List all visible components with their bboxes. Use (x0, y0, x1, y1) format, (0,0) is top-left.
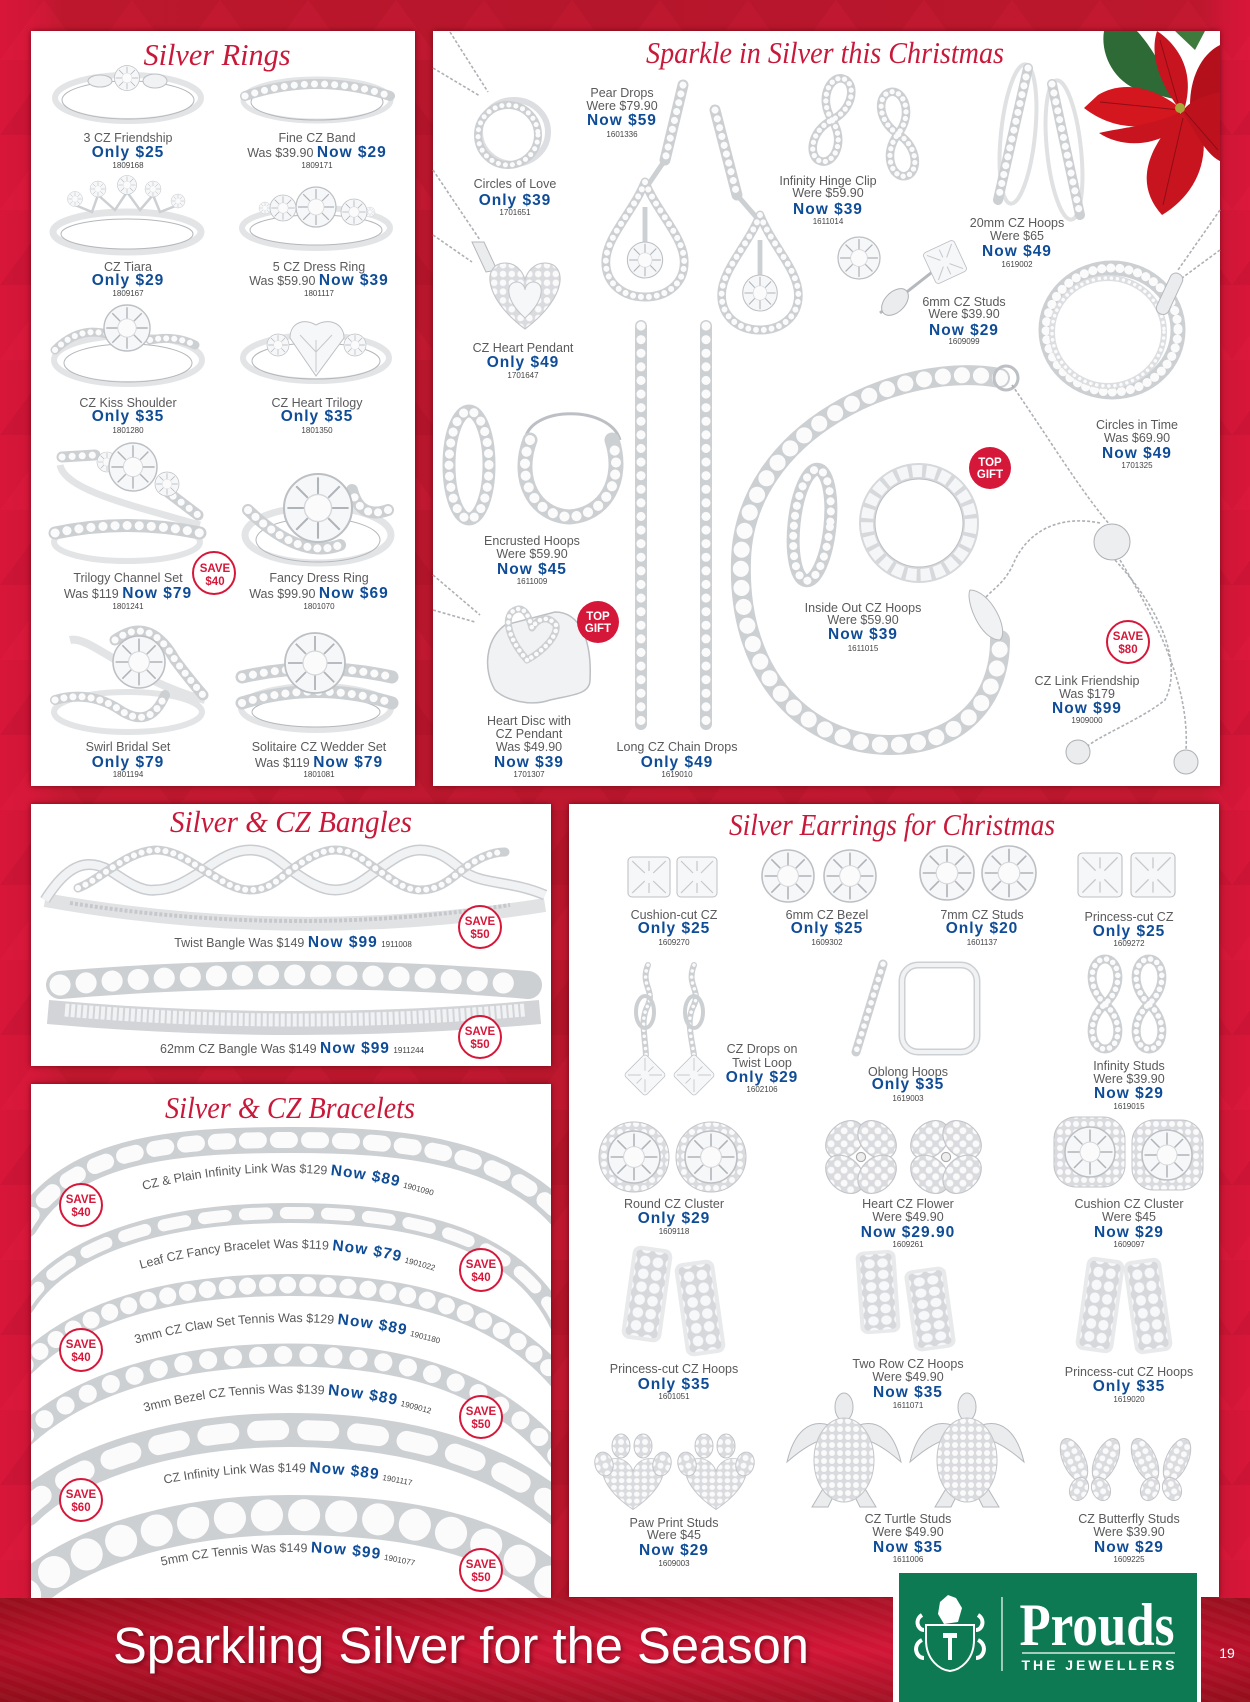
label: trilogy channel set: Trilogy Channel Set (73, 571, 183, 585)
label: heart CZ flower: Now $29.90 (861, 1224, 955, 1241)
label: circles in time: Was $69.90 (1104, 431, 1170, 445)
label: princess-cut CZ hoops: Only $35 (638, 1376, 710, 1393)
label: CZ heart pendant: CZ Heart Pendant (473, 341, 574, 355)
label: CZ and plain infinity link: CZ & Plain Infinity Link Was $129 Now $89 1901090 (142, 1164, 434, 1196)
label: 3 CZ friendship: 1809168 (112, 161, 144, 170)
label: round CZ cluster: 1609118 (659, 1227, 690, 1236)
label: circles in time: 1701325 (1121, 461, 1153, 470)
label: CZ link friendship: Was $179 (1059, 687, 1115, 701)
badge: save $50: $50 (470, 1039, 490, 1051)
label: cushion-cut CZ: 1609270 (658, 938, 690, 947)
label: long CZ chain drops: Long CZ Chain Drops (617, 740, 737, 754)
label: infinity studs: Were $39.90 (1093, 1072, 1165, 1086)
label: princess-cut CZ hoops: 1601051 (658, 1392, 690, 1401)
label: princess-cut CZ: Princess-cut CZ (1085, 910, 1174, 924)
label: CZ tiara: CZ Tiara (104, 260, 152, 274)
label: long CZ chain drops: 1619010 (661, 770, 693, 779)
label: trilogy channel set: Was $119 Now $79 (64, 585, 192, 602)
label: twist bangle: Twist Bangle Was $149 Now $99 1911008 (174, 934, 412, 951)
label: 7mm CZ studs: Only $20 (946, 920, 1018, 937)
label: solitaire CZ wedder set: 1801081 (303, 770, 335, 779)
label: cushion CZ cluster (1074, 1197, 1184, 1249)
icon: pear drop earrings (606, 85, 798, 330)
label: circles in time (1096, 418, 1178, 470)
label: paw print studs (630, 1516, 718, 1568)
icon: crest (916, 1595, 984, 1671)
label: CZ turtle studs: Now $35 (873, 1539, 943, 1556)
label: 6mm CZ bezel: Only $25 (791, 920, 863, 937)
badge: save $80: SAVE (1113, 631, 1144, 643)
label: infinity hinge clip (779, 174, 877, 226)
badge: top gift: TOP (586, 611, 610, 623)
badge: save $50: $50 (471, 1572, 491, 1584)
label: two row CZ hoops: Were $49.90 (872, 1370, 944, 1384)
label: princess-cut CZ hoops (610, 1362, 738, 1401)
label: 5 CZ dress ring: 5 CZ Dress Ring (273, 260, 365, 274)
label: leaf CZ fancy bracelet: Leaf CZ Fancy Bracelet Was $119 Now $79 1901022 (140, 1239, 436, 1271)
label: CZ tiara (92, 260, 164, 298)
label: 6mm CZ bezel: 1609302 (811, 938, 843, 947)
divider line in logo (1001, 1597, 1003, 1671)
icon: long CZ chain drop earrings (641, 326, 706, 724)
label: CZ turtle studs (865, 1512, 951, 1564)
label: princess-cut CZ hoops: Princess-cut CZ Hoops (610, 1362, 738, 1376)
label: CZ turtle studs: CZ Turtle Studs (865, 1512, 951, 1526)
label: 6mm CZ bezel (786, 908, 868, 947)
badge: save $40: $40 (71, 1352, 91, 1364)
heading: bangles: Silver & CZ Bangles (170, 804, 412, 839)
label: CZ heart trilogy: CZ Heart Trilogy (272, 396, 363, 410)
label: CZ heart trilogy: 1801350 (301, 426, 333, 435)
badge: save $50: $50 (470, 929, 490, 941)
label: princess-cut CZ: 1609272 (1113, 939, 1145, 948)
label: two row CZ hoops: Now $35 (873, 1384, 943, 1401)
label: paw print studs: Paw Print Studs (630, 1516, 718, 1530)
label: inside out CZ hoops: 1611015 (848, 644, 879, 653)
page number: 19 (1219, 1645, 1235, 1661)
label: 6mm CZ studs: 6mm CZ Studs (922, 295, 1006, 309)
label: inside out CZ hoops: Were $59.90 (827, 613, 899, 627)
label: CZ link friendship (1035, 674, 1139, 725)
label: long CZ chain drops: Only $49 (641, 754, 713, 771)
label: cushion CZ cluster: Were $45 (1102, 1210, 1156, 1224)
icon: CZ kiss shoulder ring (54, 305, 202, 384)
label: heart disc with CZ pendant: 1701307 (513, 770, 545, 779)
badge: save $40: SAVE (66, 1339, 97, 1351)
icon: fine CZ band (243, 79, 391, 121)
icon: trilogy channel ring set (54, 443, 200, 561)
badge: save $50: SAVE (465, 916, 496, 928)
label: CZ link friendship: CZ Link Friendship (1035, 674, 1139, 688)
label: oblong hoops (868, 1065, 948, 1103)
heading: bracelets: Silver & CZ Bracelets (165, 1090, 415, 1125)
label: 6mm CZ studs: Now $29 (929, 322, 999, 339)
label: cushion-cut CZ: Cushion-cut CZ (631, 908, 718, 922)
label: cushion-cut CZ (631, 908, 718, 947)
label: CZ tiara: Only $29 (92, 272, 164, 289)
badge: save $60: $60 (71, 1502, 91, 1514)
label: swirl bridal set: 1801194 (113, 770, 144, 779)
label: pear drops (586, 86, 658, 139)
icon: 62mm CZ bangle (48, 975, 540, 1023)
label: 5 CZ dress ring (249, 260, 389, 298)
label: CZ infinity link: CZ Infinity Link Was $149 Now $89 1901117 (164, 1462, 412, 1486)
panel: silver and CZ bangles (31, 804, 551, 1066)
label: 5mm CZ tennis: 5mm CZ Tennis Was $149 Now $99 1901077 (160, 1542, 416, 1566)
icon: oblong hoop earrings (856, 964, 977, 1052)
label: encrusted hoops: Encrusted Hoops (484, 534, 580, 548)
label: 7mm CZ studs: 1601137 (967, 938, 998, 947)
badge: save $80: $80 (1118, 644, 1138, 656)
icon: CZ drops on twist loop earrings (624, 965, 715, 1096)
badge: save $60: SAVE (66, 1489, 97, 1501)
label: inside out CZ hoops (805, 601, 921, 653)
label: long CZ chain drops (617, 740, 737, 779)
label: CZ butterfly studs (1078, 1512, 1180, 1564)
icon: paw print studs (592, 1434, 757, 1510)
heading: silver rings: Silver Rings (144, 37, 290, 72)
icon: solitaire CZ wedder ring set (241, 633, 392, 730)
logo wordmark: Prouds (1020, 1592, 1174, 1658)
label: infinity hinge clip: Were $59.90 (792, 186, 864, 200)
label: trilogy channel set: 1801241 (112, 602, 144, 611)
label: solitaire CZ wedder set: Solitaire CZ Wedder Set (252, 740, 387, 754)
icon: encrusted hoop earrings (449, 411, 620, 519)
heading: sparkle in silver: Sparkle in Silver this Christmas (646, 35, 1004, 70)
label: CZ butterfly studs: 1609225 (1113, 1555, 1145, 1564)
badge: save $50 (460, 1549, 502, 1591)
footer slogan: Sparkling Silver for the Season (113, 1617, 809, 1674)
label: infinity studs: Now $29 (1094, 1085, 1164, 1102)
label: heart disc with CZ pendant: Heart Disc with (487, 714, 571, 728)
label: round CZ cluster: Round CZ Cluster (624, 1197, 724, 1211)
label: heart disc with CZ pendant (487, 714, 571, 779)
badge: save $40: SAVE (66, 1194, 97, 1206)
label: swirl bridal set: Only $79 (92, 754, 164, 771)
icon: cushion CZ cluster studs (1054, 1117, 1203, 1190)
label: 20mm CZ hoops: 20mm CZ Hoops (970, 216, 1064, 230)
label: infinity studs (1093, 1059, 1165, 1111)
logo tagline: THE JEWELLERS (1022, 1657, 1174, 1673)
icon: princess-cut studs (1078, 853, 1175, 897)
label: CZ drops on twist loop (726, 1042, 798, 1094)
label: circles of love: 1701651 (499, 208, 531, 217)
label: solitaire CZ wedder set: Was $119 Now $79 (255, 754, 383, 771)
label: 7mm CZ studs: 7mm CZ Studs (940, 908, 1024, 922)
label: encrusted hoops: Were $59.90 (496, 547, 568, 561)
label: 7mm CZ studs (940, 908, 1024, 947)
label: princess-cut CZ hoops: Princess-cut CZ Hoops (1065, 1365, 1193, 1379)
icon: 20mm CZ hoop earrings (994, 63, 1088, 221)
label: 3 CZ friendship: 3 CZ Friendship (84, 131, 173, 145)
label: infinity hinge clip: 1611014 (813, 217, 844, 226)
icon: CZ turtle studs (787, 1393, 1024, 1507)
label: 3 CZ friendship (84, 131, 173, 170)
label: round CZ cluster (624, 1197, 724, 1236)
icon: 3 CZ friendship ring (55, 66, 201, 121)
label: heart disc with CZ pendant: Was $49.90 (496, 740, 562, 754)
badge: save $40: $40 (71, 1207, 91, 1219)
icon: 6mm bezel studs (762, 850, 876, 902)
label: pear drops: Now $59 (587, 112, 657, 129)
label: princess-cut CZ hoops (1065, 1365, 1193, 1404)
label: CZ kiss shoulder: CZ Kiss Shoulder (79, 396, 177, 410)
panel: silver earrings for Christmas (569, 804, 1219, 1597)
label: 3 CZ friendship: Only $25 (92, 144, 164, 161)
label: CZ drops on twist loop: Twist Loop (732, 1056, 792, 1070)
label: princess-cut CZ hoops: Only $35 (1093, 1378, 1165, 1395)
badge: top gift: GIFT (977, 469, 1003, 481)
label: CZ kiss shoulder: 1801280 (112, 426, 144, 435)
icon: infinity studs (1092, 959, 1162, 1049)
label: 6mm CZ studs: Were $39.90 (928, 307, 1000, 321)
badge: save $50 (459, 906, 501, 948)
label: fine CZ band: 1809171 (301, 161, 333, 170)
label: two row CZ hoops: Two Row CZ Hoops (852, 1357, 964, 1371)
label: fine CZ band: Was $39.90 Now $29 (247, 144, 387, 161)
badge: save $40 (60, 1329, 102, 1371)
label: two row CZ hoops: 1611071 (893, 1401, 924, 1410)
badge: top gift: GIFT (585, 623, 611, 635)
icon: 7mm CZ studs (920, 846, 1036, 900)
badge: save $40: SAVE (200, 563, 231, 575)
badge: save $60 (60, 1479, 102, 1521)
label: circles of love: Only $39 (479, 192, 551, 209)
icon: six curved bracelets (25, 1140, 560, 1595)
label: oblong hoops: Only $35 (872, 1076, 944, 1093)
label: circles of love: Circles of Love (474, 177, 556, 191)
icon: cushion-cut studs (628, 857, 717, 897)
badge: save $50: $50 (471, 1419, 491, 1431)
label: CZ link friendship: 1909000 (1071, 716, 1103, 725)
label: fine CZ band (247, 131, 387, 170)
label: princess-cut CZ (1085, 910, 1174, 948)
icon: 5 CZ dress ring (242, 187, 390, 248)
label: 6mm CZ studs (922, 295, 1006, 346)
label: pear drops: Pear Drops (590, 86, 654, 100)
label: 3mm CZ claw set tennis: 3mm CZ Claw Set Tennis Was $129 Now $89 1901180 (134, 1313, 440, 1344)
label: inside out CZ hoops: Now $39 (828, 626, 898, 643)
label: paw print studs: 1609003 (658, 1559, 690, 1568)
label: CZ butterfly studs: Now $29 (1094, 1539, 1164, 1556)
badge: save $50: SAVE (466, 1559, 497, 1571)
icon: heart CZ flower studs (818, 1113, 989, 1201)
label: CZ heart pendant: Only $49 (487, 354, 559, 371)
label: fancy dress ring: Was $99.90 Now $69 (249, 585, 389, 602)
label: 20mm CZ hoops (970, 216, 1064, 269)
label: infinity studs: Infinity Studs (1093, 1059, 1165, 1073)
label: heart CZ flower: 1609261 (892, 1240, 924, 1249)
label: CZ link friendship: Now $99 (1052, 700, 1122, 717)
icon: CZ butterfly studs (1055, 1435, 1196, 1504)
label: paw print studs: Now $29 (639, 1542, 709, 1559)
label: fancy dress ring: Fancy Dress Ring (269, 571, 369, 585)
label: CZ turtle studs: Were $49.90 (872, 1525, 944, 1539)
label: oblong hoops: Oblong Hoops (868, 1065, 948, 1079)
icon: fancy dress ring (245, 474, 391, 563)
label: infinity studs: 1619015 (1113, 1102, 1145, 1111)
panel: silver rings (31, 31, 415, 786)
badge: save $40: $40 (205, 576, 225, 588)
icon: CZ heart pendant (433, 170, 560, 329)
label: CZ heart pendant (473, 341, 574, 380)
icon: CZ tiara ring (53, 176, 201, 252)
label: 20mm CZ hoops: Now $49 (982, 243, 1052, 260)
logo: Prouds the Jewellers (893, 1568, 1201, 1702)
label: infinity hinge clip: Now $39 (793, 201, 863, 218)
label: encrusted hoops: Now $45 (497, 561, 567, 578)
icon: circles in time pendant (1046, 210, 1220, 392)
icon: 6mm CZ stud earrings (838, 237, 968, 320)
label: princess-cut CZ hoops: 1619020 (1113, 1395, 1145, 1404)
label: heart disc with CZ pendant: CZ Pendant (496, 727, 563, 741)
label: 6mm CZ bezel: 6mm CZ Bezel (786, 908, 868, 922)
label: 5 CZ dress ring: 1801117 (304, 289, 335, 298)
label: CZ drops on twist loop: 1602106 (746, 1085, 778, 1094)
label: princess-cut CZ: Only $25 (1093, 923, 1165, 940)
label: heart CZ flower: Heart CZ Flower (862, 1197, 954, 1211)
icon: CZ link friendship bracelet (741, 366, 1198, 774)
label: cushion CZ cluster: Now $29 (1094, 1224, 1164, 1241)
label: heart disc with CZ pendant: Now $39 (494, 754, 564, 771)
label: oblong hoops: 1619003 (892, 1094, 924, 1103)
label: paw print studs: Were $45 (647, 1528, 701, 1542)
icon: inside out CZ hoop earrings (788, 467, 971, 583)
badge: top gift: TOP (978, 457, 1002, 469)
icon: round CZ cluster studs (599, 1122, 746, 1192)
label: CZ kiss shoulder: Only $35 (92, 408, 164, 425)
label: fancy dress ring (249, 571, 389, 611)
heading: silver earrings: Silver Earrings for Christmas (729, 807, 1055, 842)
badge: save $50 (459, 1016, 501, 1058)
icon: CZ heart trilogy ring (243, 322, 389, 381)
label: circles in time: Circles in Time (1096, 418, 1178, 432)
label: cushion CZ cluster: Cushion CZ Cluster (1074, 1197, 1184, 1211)
label: cushion CZ cluster: 1609097 (1113, 1240, 1145, 1249)
label: two row CZ hoops (852, 1357, 964, 1410)
badge: save $40: $40 (471, 1272, 491, 1284)
label: CZ heart trilogy (272, 396, 363, 435)
icon: poinsettia (1084, 31, 1222, 215)
label: CZ drops on twist loop: CZ Drops on (727, 1042, 797, 1056)
icon: circles of love pendant (433, 32, 548, 165)
badge: save $50: SAVE (465, 1026, 496, 1038)
icon: two row CZ hoops (857, 1251, 954, 1350)
label: round CZ cluster: Only $29 (638, 1210, 710, 1227)
label: cushion-cut CZ: Only $25 (638, 920, 710, 937)
icon: swirl bridal ring set (54, 631, 205, 732)
icon: heart disc pendant (433, 575, 590, 703)
label: 62mm CZ bangle: 62mm CZ Bangle Was $149 Now $99 1911244 (160, 1040, 425, 1057)
badge: save $40 (193, 552, 235, 594)
label: 20mm CZ hoops: Were $65 (990, 229, 1044, 243)
label: swirl bridal set: Swirl Bridal Set (86, 740, 171, 754)
icon: princess-cut CZ hoops (623, 1247, 724, 1355)
label: fine CZ band: Fine CZ Band (278, 131, 356, 145)
label: heart CZ flower (861, 1197, 955, 1249)
badge: save $40 (460, 1249, 502, 1291)
label: CZ butterfly studs: Were $39.90 (1093, 1525, 1165, 1539)
badge: top gift (969, 447, 1011, 489)
label: heart CZ flower: Were $49.90 (872, 1210, 944, 1224)
label: CZ tiara: 1809167 (112, 289, 144, 298)
badge: save $40 (60, 1184, 102, 1226)
badge: save $50 (460, 1396, 502, 1438)
label: CZ butterfly studs: CZ Butterfly Studs (1078, 1512, 1180, 1526)
label: inside out CZ hoops: Inside Out CZ Hoops (805, 601, 921, 615)
label: circles in time: Now $49 (1102, 445, 1172, 462)
label: CZ heart trilogy: Only $35 (281, 408, 353, 425)
badge: save $50: SAVE (466, 1406, 497, 1418)
label: solitaire CZ wedder set (252, 740, 387, 779)
label: trilogy channel set (64, 571, 192, 611)
panel: sparkle in silver this Christmas (433, 31, 1222, 786)
label: CZ turtle studs: 1611006 (893, 1555, 924, 1564)
footer band (0, 1598, 1250, 1702)
label: CZ drops on twist loop: Only $29 (726, 1069, 798, 1086)
label: circles of love (474, 177, 556, 217)
label: CZ heart pendant: 1701647 (507, 371, 539, 380)
label: CZ kiss shoulder (79, 396, 177, 435)
label: 3mm bezel CZ tennis: 3mm Bezel CZ Tennis Was $139 Now $89 1909012 (144, 1384, 432, 1414)
label: fancy dress ring: 1801070 (303, 602, 335, 611)
label: encrusted hoops: 1611009 (517, 577, 548, 586)
label: pear drops: Were $79.90 (586, 99, 658, 113)
badge: save $80 (1107, 621, 1149, 663)
badge: save $40: SAVE (466, 1259, 497, 1271)
icon: twist bangle (45, 850, 545, 924)
label: infinity hinge clip: Infinity Hinge Clip (779, 174, 877, 188)
icon: infinity hinge clip earrings (809, 76, 917, 178)
label: encrusted hoops (484, 534, 580, 586)
badge: top gift (577, 601, 619, 643)
label: 5 CZ dress ring: Was $59.90 Now $39 (249, 272, 389, 289)
label: 6mm CZ studs: 1609099 (948, 337, 980, 346)
label: 20mm CZ hoops: 1619002 (1001, 260, 1033, 269)
panel: silver and CZ bracelets (27, 1080, 554, 1598)
icon: princess-cut CZ hoops (1077, 1258, 1171, 1353)
label: pear drops: 1601336 (606, 130, 638, 139)
label: swirl bridal set (86, 740, 171, 779)
